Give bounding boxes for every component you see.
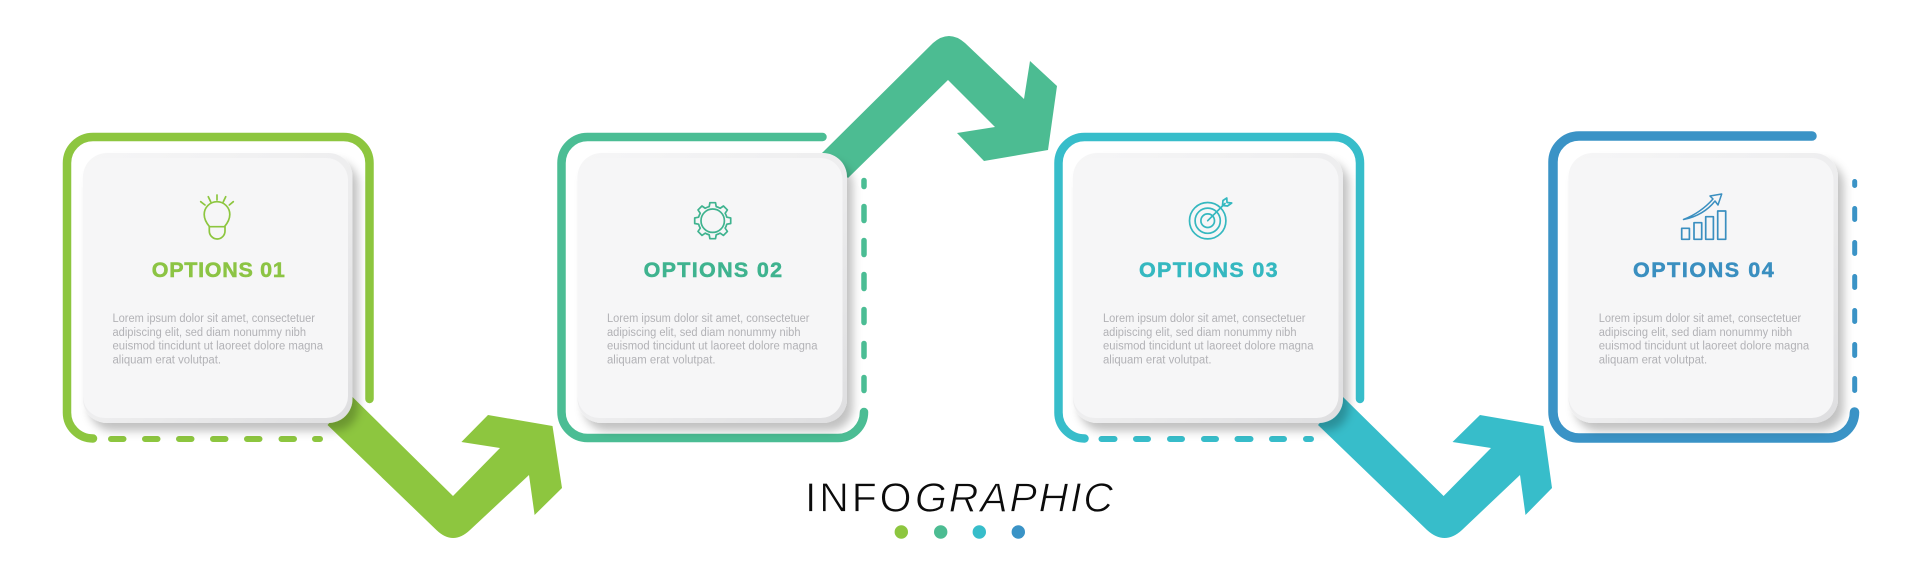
arrow 01 xyxy=(328,397,562,538)
title: infographic: GRAPHIC xyxy=(915,475,1113,521)
body text 03: Lorem ipsum dolor sit amet, consectetuer xyxy=(1103,313,1306,325)
body text 01 xyxy=(112,313,324,366)
colour dots xyxy=(895,525,1025,539)
arrow 02 xyxy=(822,36,1057,178)
icon: growth chart xyxy=(1682,194,1726,239)
card 04 xyxy=(1568,153,1838,423)
frame 03 xyxy=(1058,137,1360,439)
body text 01: euismod tincidunt ut laoreet dolore magna xyxy=(112,341,324,353)
heading: options 04: OPTIONS 04 xyxy=(1633,258,1774,282)
body text 03: aliquam erat volutpat. xyxy=(1103,354,1212,366)
body text 04: Lorem ipsum dolor sit amet, consectetuer xyxy=(1599,313,1801,325)
body text 02: Lorem ipsum dolor sit amet, consectetuer xyxy=(607,313,810,325)
body text 02: aliquam erat volutpat. xyxy=(607,354,716,366)
title: infographic xyxy=(805,475,1113,521)
body text 01: adipiscing elit, sed diam nonummy nibh xyxy=(112,327,306,339)
card 02 xyxy=(578,153,847,423)
body text 03 xyxy=(1103,313,1314,366)
body text 02 xyxy=(607,313,818,366)
frame 01 xyxy=(67,137,370,439)
panel: options 04 xyxy=(1553,136,1855,438)
body text 04: euismod tincidunt ut laoreet dolore magna xyxy=(1599,341,1810,353)
body text 01: aliquam erat volutpat. xyxy=(112,354,221,366)
card 03 xyxy=(1073,153,1343,423)
body text 03: adipiscing elit, sed diam nonummy nibh xyxy=(1103,327,1296,339)
icon: light bulb xyxy=(201,195,233,239)
heading: options 03: OPTIONS 03 xyxy=(1139,258,1278,282)
frame 04 xyxy=(1553,136,1855,438)
title: infographic: INFO xyxy=(805,475,912,521)
body text 01: Lorem ipsum dolor sit amet, consectetuer xyxy=(112,313,315,325)
arrow 03 xyxy=(1318,397,1552,538)
body text 02: adipiscing elit, sed diam nonummy nibh xyxy=(607,327,800,339)
heading: options 01: OPTIONS 01 xyxy=(152,258,285,282)
body text 02: euismod tincidunt ut laoreet dolore magna xyxy=(607,341,818,353)
icon: target xyxy=(1190,198,1232,239)
body text 04 xyxy=(1599,313,1810,366)
heading: options 02: OPTIONS 02 xyxy=(644,258,782,282)
panel: options 01 xyxy=(67,137,562,538)
body text 04: aliquam erat volutpat. xyxy=(1599,354,1707,366)
panel: options 03 xyxy=(1058,137,1552,538)
card 01 xyxy=(83,153,352,423)
panel: options 02 xyxy=(562,36,1057,438)
icon: gear xyxy=(695,203,731,239)
frame 02 xyxy=(562,137,864,438)
body text 04: adipiscing elit, sed diam nonummy nibh xyxy=(1599,327,1792,339)
body text 03: euismod tincidunt ut laoreet dolore magna xyxy=(1103,341,1314,353)
